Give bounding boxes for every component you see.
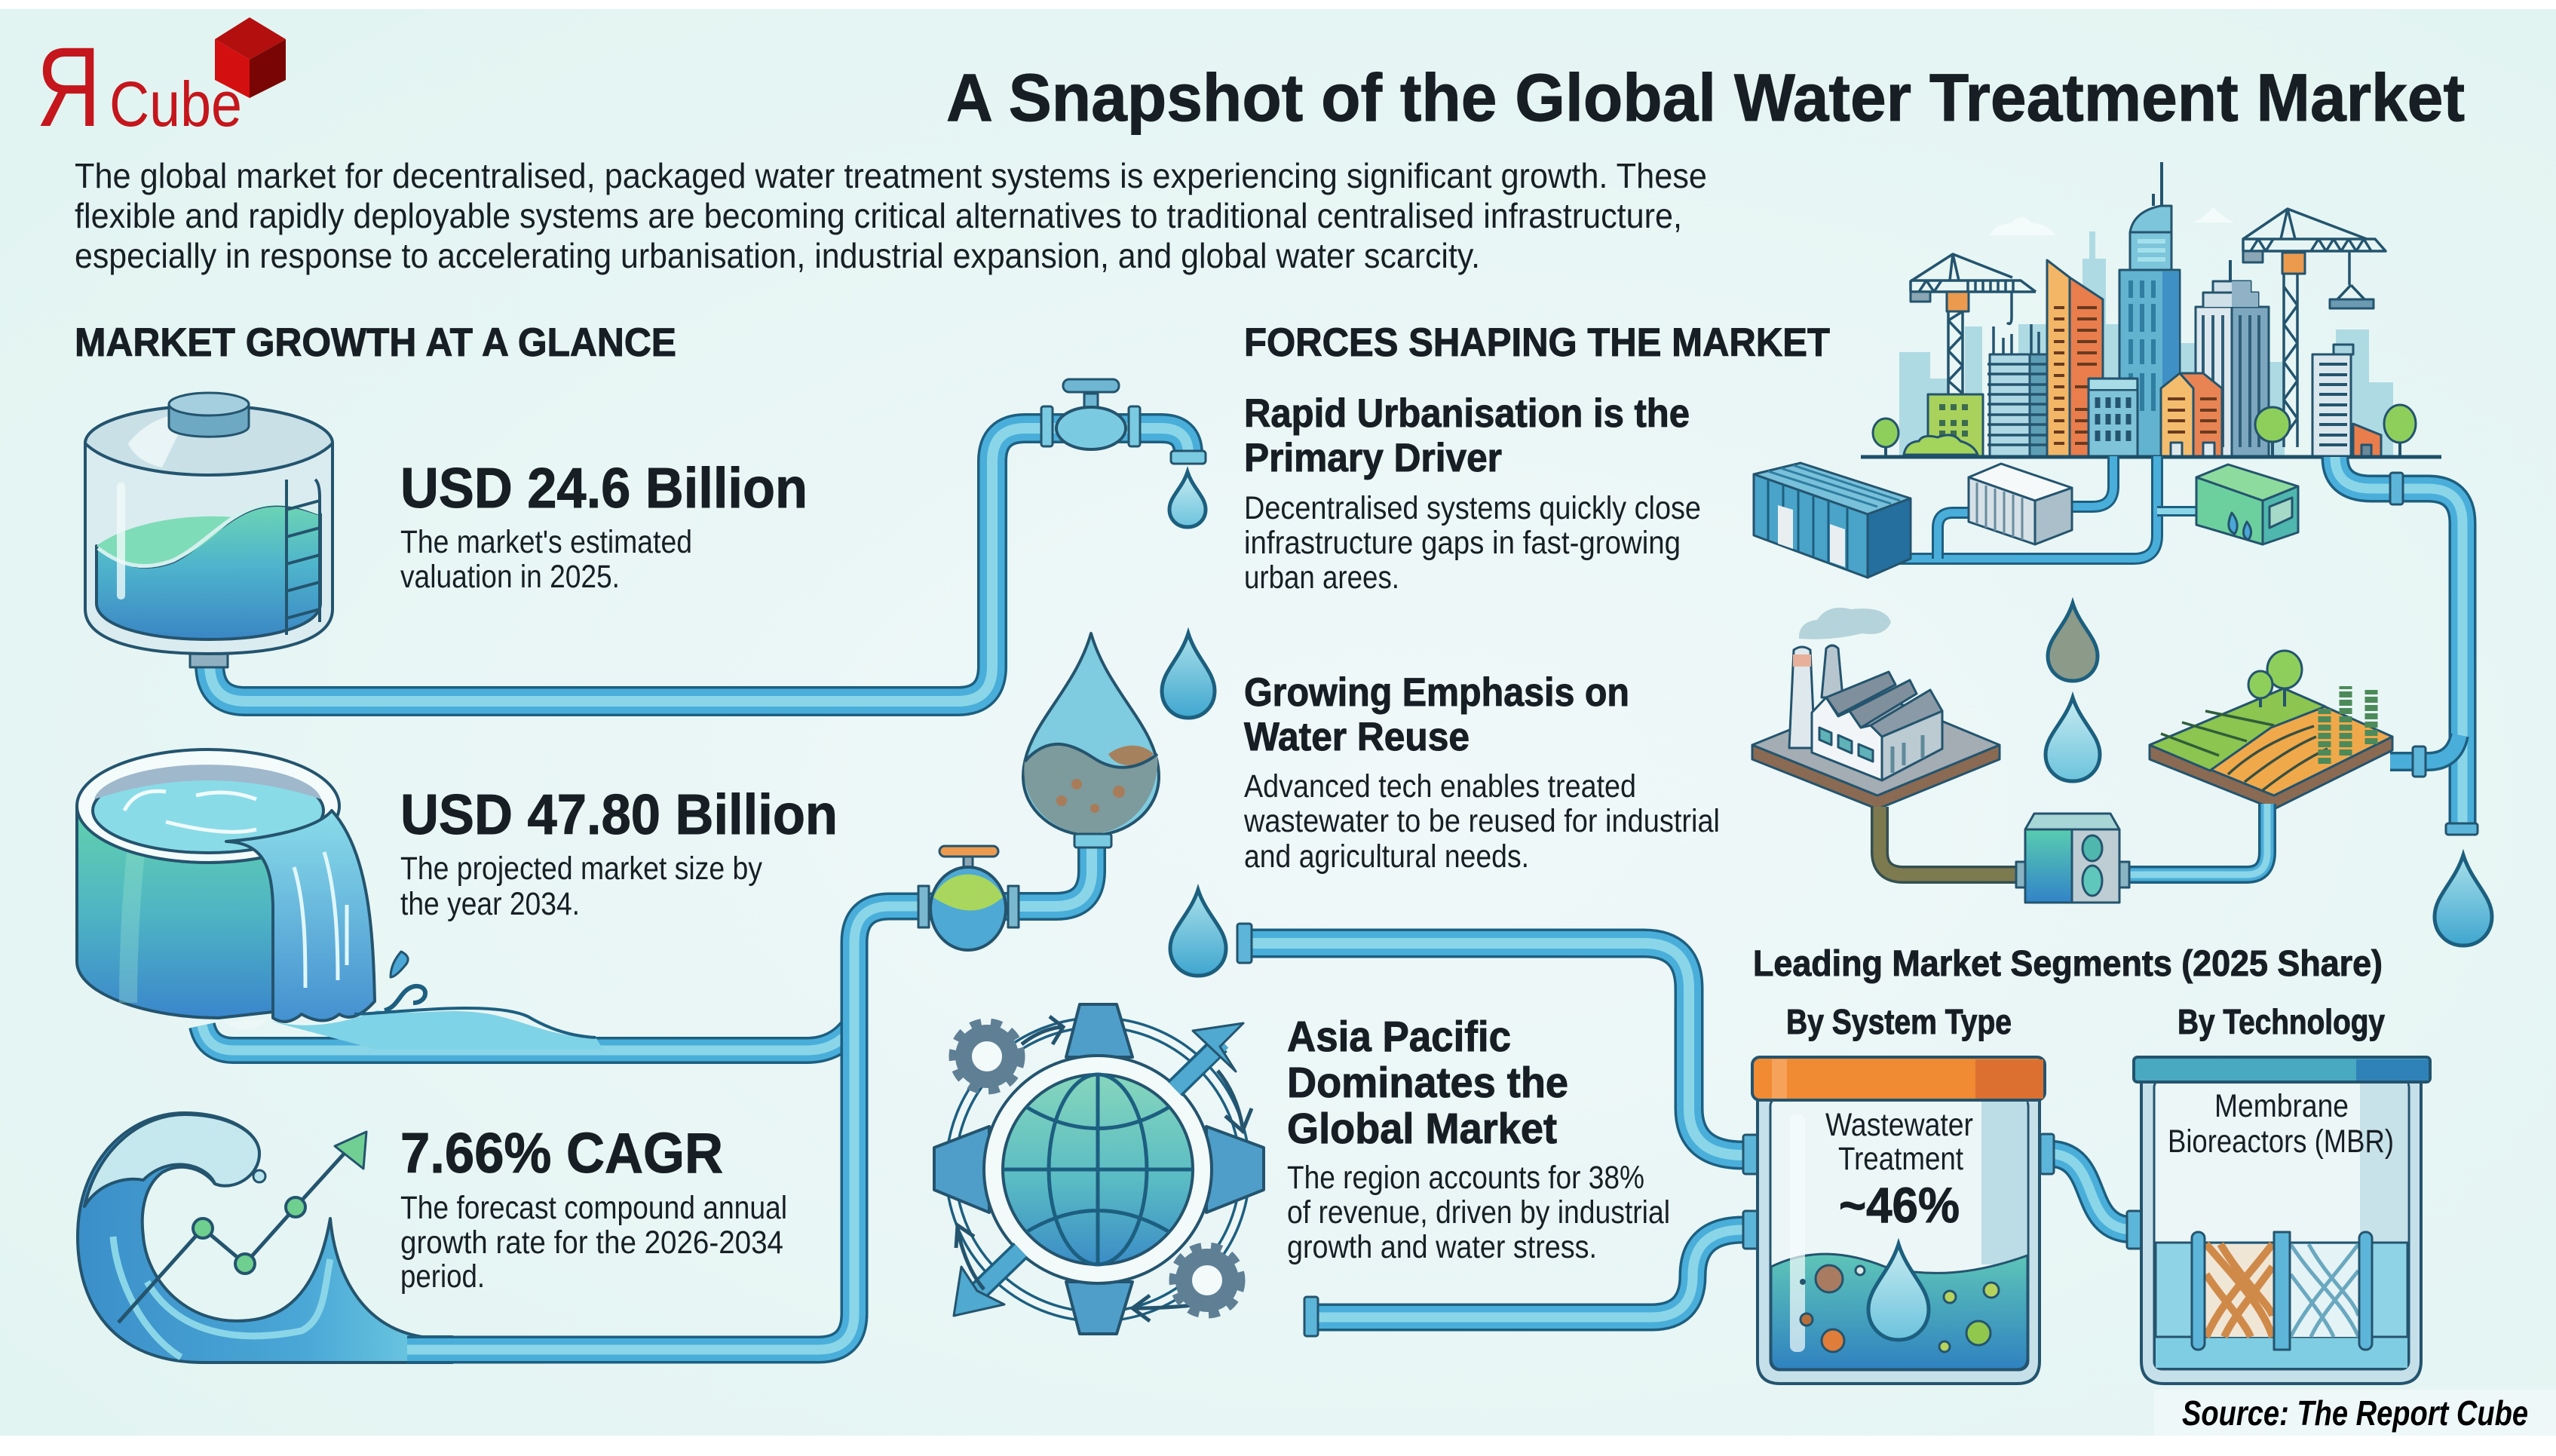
intro text: flexible and rapidly deployable systems are becoming critical alternatives to traditional centralised infrastructure, bbox=[75, 196, 1682, 235]
icon: wastewater treatment tank bbox=[1743, 1057, 2054, 1384]
text: rapid urbanisation bbox=[1244, 391, 1701, 596]
stat: USD 47.80 Billion: The projected market size by bbox=[400, 851, 762, 887]
text: asia pacific bbox=[1287, 1013, 1670, 1265]
icon: membrane bioreactor tank bbox=[2127, 1057, 2430, 1384]
logo: RCube: Cube bbox=[109, 69, 242, 139]
text: wastewater treatment share bbox=[1825, 1107, 1973, 1233]
icon: grey drop bbox=[2048, 603, 2098, 681]
text: rapid urbanisation: Decentralised systems quickly close bbox=[1244, 490, 1701, 526]
text: wastewater treatment share: Wastewater bbox=[1825, 1107, 1973, 1143]
heading: by technology: By Technology bbox=[2178, 1002, 2385, 1041]
icon: green container bbox=[2196, 464, 2298, 544]
icon: small drop bbox=[1162, 633, 1215, 718]
text: membrane bioreactors: Bioreactors (MBR) bbox=[2168, 1123, 2394, 1160]
stat: 7.66% CAGR: period. bbox=[400, 1258, 485, 1295]
pipe fittings bbox=[2390, 473, 2478, 835]
stat: USD 24.6 Billion: The market's estimated bbox=[400, 524, 692, 560]
text: membrane bioreactors bbox=[2168, 1088, 2394, 1160]
icon: blue shipping container bbox=[1754, 463, 1911, 578]
text: asia pacific: growth and water stress. bbox=[1287, 1229, 1597, 1265]
title: A Snapshot of the Global Water Treatment Market bbox=[946, 60, 2465, 135]
text: rapid urbanisation: Rapid Urbanisation is the bbox=[1244, 391, 1690, 436]
icon: globe with gears bbox=[934, 1004, 1264, 1334]
stat: USD 24.6 Billion: USD 24.6 Billion bbox=[400, 456, 808, 520]
text: rapid urbanisation: urban arees. bbox=[1244, 559, 1399, 596]
pipe: blue treated water bbox=[2125, 804, 2267, 875]
icon: factory bbox=[1752, 608, 2000, 809]
stat: 7.66% CAGR bbox=[400, 1121, 787, 1295]
pipe: to wastewater tank lower bbox=[1310, 1230, 1743, 1317]
stat: USD 47.80 Billion: USD 47.80 Billion bbox=[400, 783, 838, 846]
pipe: wave to valve bbox=[302, 906, 935, 1350]
text: asia pacific: Global Market bbox=[1287, 1105, 1557, 1153]
text: asia pacific: Dominates the bbox=[1287, 1059, 1568, 1107]
stat: 7.66% CAGR: 7.66% CAGR bbox=[400, 1121, 723, 1185]
text: water reuse bbox=[1243, 670, 1720, 875]
stat: 7.66% CAGR: growth rate for the 2026-2034 bbox=[400, 1225, 783, 1261]
text: wastewater treatment share: Treatment bbox=[1838, 1141, 1963, 1177]
heading: leading market segments: Leading Market Segments (2025 Share) bbox=[1753, 944, 2383, 984]
pipe: between tanks bbox=[2048, 1154, 2134, 1230]
pipe: valve to large drop bbox=[1003, 846, 1092, 906]
text: water reuse: wastewater to be reused for industrial bbox=[1243, 803, 1720, 839]
icon: final drop right bbox=[2435, 855, 2492, 946]
heading: market growth: MARKET GROWTH AT A GLANCE bbox=[75, 320, 676, 365]
text: water reuse: Advanced tech enables treated bbox=[1244, 768, 1636, 805]
drop beside pipe bbox=[1170, 890, 1226, 976]
icon: tap with flanges bbox=[1041, 379, 1206, 464]
intro text: especially in response to accelerating urbanisation, industrial expansion, and global water scarcity. bbox=[75, 236, 1480, 275]
pipe: city to right side bbox=[2335, 457, 2463, 826]
splash and pool on pipe bbox=[225, 952, 603, 1050]
icon: farm bbox=[2150, 651, 2392, 809]
stat: USD 24.6 Billion: valuation in 2025. bbox=[400, 559, 620, 595]
icon: drop in wastewater tank bbox=[1868, 1244, 1929, 1340]
text: water reuse: Water Reuse bbox=[1244, 715, 1470, 759]
logo: RCube bbox=[36, 17, 286, 150]
icon: clean drop bbox=[2046, 697, 2100, 781]
text: wastewater treatment share: ~46% bbox=[1839, 1177, 1960, 1233]
intro text: The global market for decentralised, packaged water treatment systems is experiencing significant growth. These bbox=[75, 156, 1707, 195]
heading: by system type: By System Type bbox=[1786, 1002, 2012, 1041]
icon: city skyline bbox=[1861, 162, 2441, 457]
text: water reuse: and agricultural needs. bbox=[1244, 838, 1529, 875]
icon: overflowing cylinder bbox=[77, 749, 375, 1022]
icon: valve bbox=[918, 846, 1019, 950]
pipe: brown wastewater bbox=[1880, 807, 2021, 875]
icon: treatment unit bbox=[2016, 814, 2129, 903]
icon: drop from tap bbox=[1169, 472, 1206, 527]
text: water reuse: Growing Emphasis on bbox=[1244, 670, 1629, 715]
icon: white container bbox=[1969, 464, 2072, 544]
stat: 7.66% CAGR: The forecast compound annual bbox=[400, 1190, 787, 1226]
text: membrane bioreactors: Membrane bbox=[2214, 1088, 2349, 1124]
icon: wave with growth chart bbox=[78, 1113, 498, 1363]
pipes: small city connectors bbox=[1892, 456, 2198, 559]
pipe: tank two to main bbox=[202, 1025, 854, 1050]
text: asia pacific: of revenue, driven by industrial bbox=[1287, 1194, 1670, 1231]
stat: USD 24.6 Billion bbox=[400, 456, 808, 595]
logo: RCube: Я bbox=[36, 23, 101, 150]
heading: forces shaping the market: FORCES SHAPING THE MARKET bbox=[1244, 320, 1830, 365]
text: rapid urbanisation: infrastructure gaps in fast-growing bbox=[1244, 525, 1681, 561]
icon: large drop with dirty water bbox=[1023, 633, 1159, 848]
pipe: to wastewater tank upper bbox=[1244, 943, 1743, 1155]
icon: storage tank bbox=[85, 393, 333, 667]
stat: USD 47.80 Billion: the year 2034. bbox=[400, 886, 580, 922]
text: rapid urbanisation: Primary Driver bbox=[1244, 436, 1502, 480]
pipe: tank to tap bbox=[210, 428, 1188, 701]
text: asia pacific: The region accounts for 38% bbox=[1287, 1160, 1644, 1196]
intro text bbox=[75, 156, 1707, 275]
pipe caps bbox=[1237, 924, 1318, 1336]
text: asia pacific: Asia Pacific bbox=[1287, 1013, 1511, 1061]
stat: USD 47.80 Billion bbox=[400, 783, 838, 922]
